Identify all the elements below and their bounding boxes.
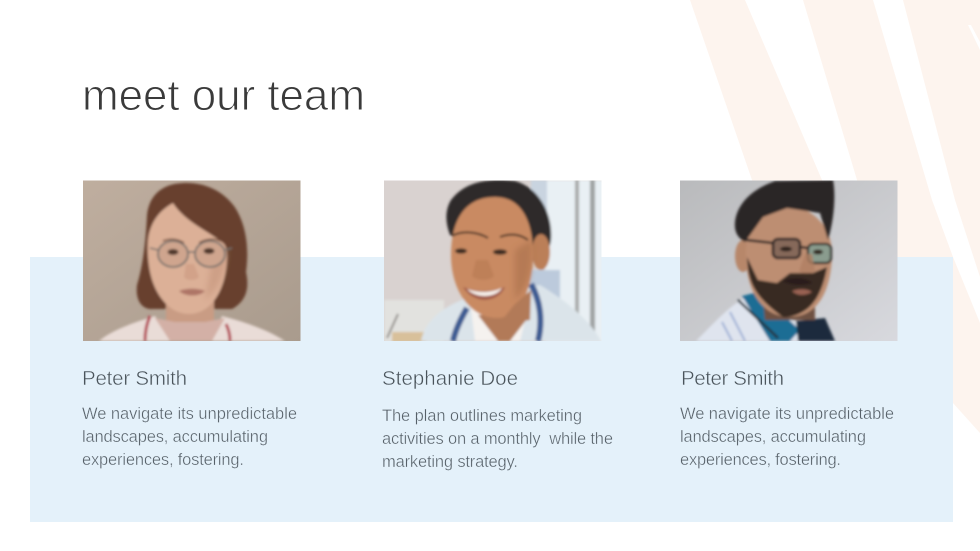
card text: Stephanie Doe xyxy=(382,367,613,471)
decorative white streak xyxy=(968,25,980,50)
description xyxy=(82,405,297,469)
panel: blue background xyxy=(30,257,953,522)
description: We navigate its unpredictable xyxy=(680,405,894,423)
card text: Peter Smith xyxy=(82,367,297,469)
description: experiences, fostering. xyxy=(680,451,841,469)
decorative brush stripes xyxy=(690,0,980,433)
description: The plan outlines marketing xyxy=(382,407,582,425)
name: Peter Smith xyxy=(681,367,784,390)
description: landscapes, accumulating xyxy=(82,428,268,446)
description: landscapes, accumulating xyxy=(680,428,866,446)
description: experiences, fostering. xyxy=(82,451,244,469)
name: Stephanie Doe xyxy=(382,367,518,390)
name: Peter Smith xyxy=(82,367,187,390)
photo: second team member xyxy=(384,180,602,341)
card text: Peter Smith (second) xyxy=(680,367,894,469)
description: activities on a monthly while the xyxy=(382,430,613,448)
photo: first team member xyxy=(83,180,300,341)
title: meet our team xyxy=(82,71,365,120)
description xyxy=(382,407,613,471)
description: We navigate its unpredictable xyxy=(82,405,297,423)
description: marketing strategy. xyxy=(382,453,518,471)
photo: third team member xyxy=(680,180,898,341)
description xyxy=(680,405,894,469)
